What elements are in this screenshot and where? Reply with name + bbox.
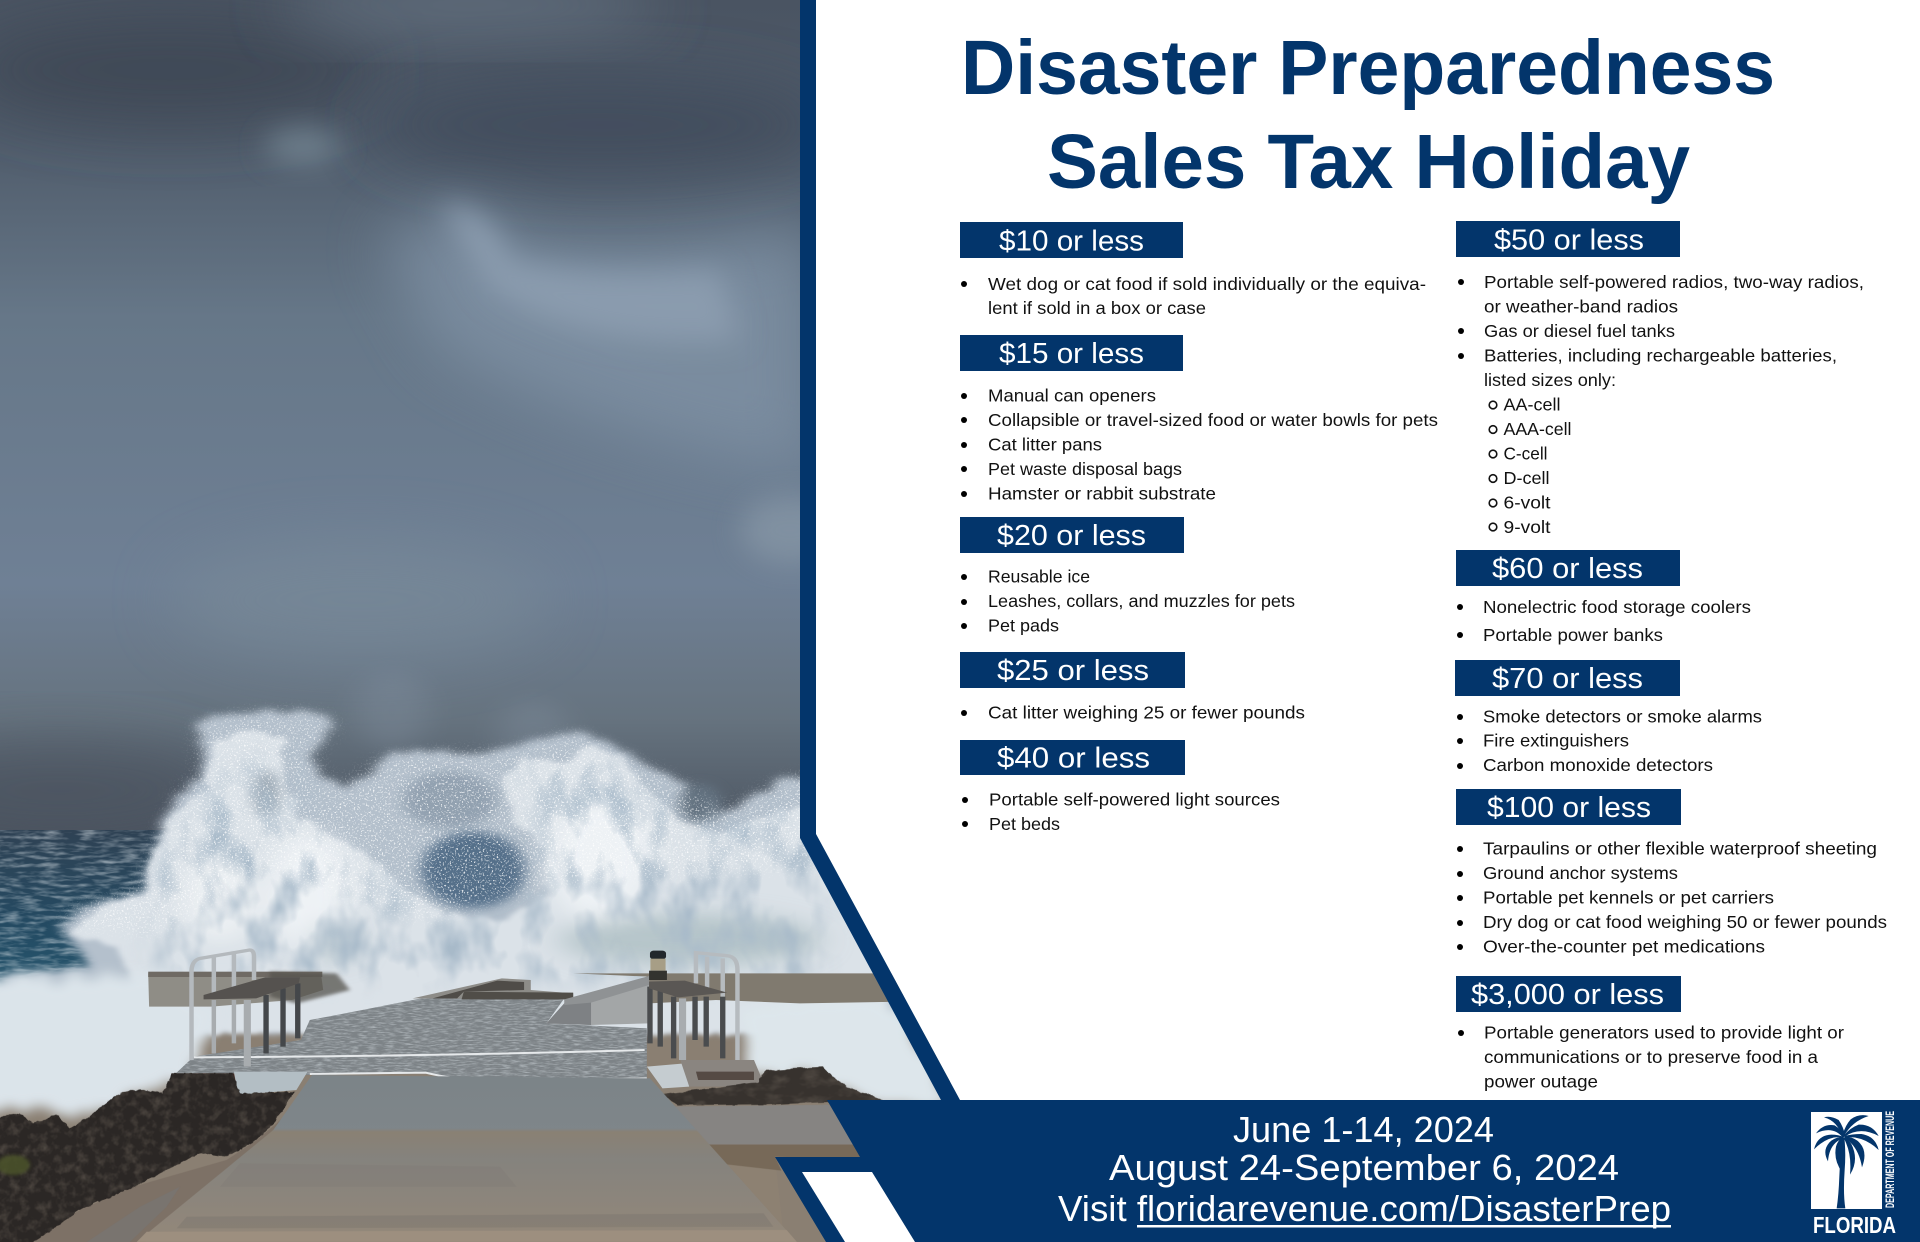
footer dates and link (1058, 1109, 1671, 1229)
sea (0, 830, 330, 1015)
section: $70 or less: Fire extinguishers (1483, 730, 1629, 750)
section: $25 or less: Cat litter weighing 25 or fewer pounds (988, 702, 1305, 722)
section: $100 or less: Tarpaulins or other flexible waterproof sheeting (1483, 838, 1877, 858)
right rocks (663, 1067, 883, 1106)
section: $10 or less: lent if sold in a box or case (988, 298, 1206, 318)
walkway bands (137, 1163, 797, 1242)
section: $50 or less: 9-volt (1504, 517, 1551, 537)
navy angled divider (800, 0, 960, 1100)
section: $10 or less: $10 or less (999, 226, 1144, 258)
section: $15 or less: Manual can openers (988, 386, 1156, 406)
section: $3,000 or less: Portable generators used to provide light or (1484, 1022, 1844, 1042)
section: $50 or less (1456, 221, 1864, 537)
section: $70 or less: Carbon monoxide detectors (1483, 755, 1713, 775)
white content panel (816, 0, 1920, 1100)
right bench and railing (649, 953, 737, 1060)
outer spray (0, 712, 994, 1033)
left rocks (0, 1073, 295, 1242)
logo wordmark: FLORIDA (1813, 1212, 1896, 1238)
panel: left price column (960, 222, 1438, 834)
pier structure (148, 950, 904, 1097)
right ground (663, 1067, 883, 1242)
footer band (775, 1100, 1920, 1242)
section: $25 or less: $25 or less (997, 655, 1149, 687)
darker gap in the spray (253, 770, 722, 908)
section: $15 or less: Pet waste disposal bags (988, 459, 1182, 479)
section: $60 or less (1456, 550, 1751, 645)
section: $20 or less: Pet pads (988, 616, 1059, 636)
photo: storm waves crashing over a pier (0, 0, 994, 1242)
gravel path (20, 1107, 293, 1242)
section: $50 or less: AA-cell (1504, 394, 1560, 414)
logo: Florida Department of Revenue (1811, 1111, 1897, 1238)
storm sky (0, 0, 840, 835)
shore at lower left (0, 1073, 797, 1242)
right slab side (708, 1145, 861, 1171)
section: $15 or less: Hamster or rabbit substrate (988, 484, 1216, 504)
section: $50 or less: Portable self-powered radios, two-way radios, (1484, 272, 1864, 292)
section: $10 or less: Wet dog or cat food if sold individually or the equiva- (988, 274, 1426, 294)
section: $15 or less: Cat litter pans (988, 434, 1102, 454)
section: $70 or less (1455, 660, 1762, 775)
section: $100 or less: Ground anchor systems (1483, 863, 1678, 883)
lantern (649, 951, 667, 980)
section: $50 or less: listed sizes only: (1484, 370, 1616, 390)
footer dates and link: August 24-September 6, 2024 (1109, 1147, 1619, 1188)
section: $100 or less: Over-the-counter pet medications (1483, 936, 1765, 956)
section: $15 or less (960, 335, 1438, 504)
left sea wall (148, 972, 350, 1007)
title: Disaster Preparedness (961, 25, 1775, 111)
section: $10 or less (960, 222, 1426, 318)
footer dates and link: June 1-14, 2024 (1233, 1109, 1494, 1150)
section: $100 or less: $100 or less (1487, 792, 1651, 824)
section: $40 or less (960, 740, 1280, 834)
section: $60 or less: Portable power banks (1483, 625, 1663, 645)
icon: palm tree (1814, 1115, 1879, 1208)
ground base under the pier (0, 1010, 950, 1242)
section: $15 or less: Collapsible or travel-sized food or water bowls for pets (988, 410, 1438, 430)
right steps (647, 1060, 765, 1088)
section: $50 or less: Batteries, including rechargeable batteries, (1484, 346, 1837, 366)
left pier base (167, 1072, 308, 1097)
section: $40 or less: Pet beds (989, 814, 1060, 834)
faint high spray (356, 670, 570, 773)
far ramp and slots (412, 978, 573, 999)
breaking wave foam (0, 670, 994, 1033)
section: $40 or less: Portable self-powered light sources (989, 790, 1280, 810)
moss on rocks (0, 1155, 30, 1175)
bright foam highlights (183, 797, 821, 967)
section: $70 or less: Smoke detectors or smoke alarms (1483, 706, 1762, 726)
main white foam body (68, 730, 889, 1033)
footer dates and link: Visit floridarevenue.com/DisasterPrep (1058, 1188, 1671, 1229)
lower foam (0, 973, 957, 1115)
right slab (673, 1105, 858, 1145)
section: $40 or less: $40 or less (997, 742, 1150, 774)
section: $100 or less (1456, 789, 1887, 956)
section: $50 or less: or weather-band radios (1484, 296, 1678, 316)
section: $70 or less: $70 or less (1492, 663, 1643, 695)
left bench and railing (192, 950, 300, 1067)
panel: right price column (1455, 221, 1887, 1092)
section: $3,000 or less: communications or to preserve food in a (1484, 1047, 1818, 1067)
section: $3,000 or less (1456, 976, 1844, 1092)
section: $50 or less: Gas or diesel fuel tanks (1484, 321, 1675, 341)
section: $50 or less: $50 or less (1494, 224, 1644, 256)
concrete side ramp (546, 976, 649, 1025)
section: $3,000 or less: $3,000 or less (1471, 979, 1664, 1011)
title (961, 25, 1775, 205)
section: $20 or less: Leashes, collars, and muzzles for pets (988, 591, 1295, 611)
foam mottling (157, 747, 820, 980)
section: $100 or less: Portable pet kennels or pet carriers (1483, 888, 1774, 908)
section: $50 or less: AAA-cell (1504, 419, 1572, 439)
logo vertical department text: DEPARTMENT OF REVENUE (1885, 1111, 1897, 1208)
title: Sales Tax Holiday (1047, 119, 1690, 205)
flooded walkway (176, 998, 647, 1082)
section: $3,000 or less: power outage (1484, 1072, 1598, 1092)
section: $25 or less (960, 652, 1305, 722)
section: $15 or less: $15 or less (999, 338, 1144, 370)
section: $60 or less: Nonelectric food storage coolers (1483, 597, 1751, 617)
dry concrete walkway (137, 1075, 797, 1242)
section: $50 or less: D-cell (1504, 468, 1550, 488)
section: $20 or less: Reusable ice (988, 566, 1090, 586)
white spray droplets (63, 713, 820, 933)
section: $20 or less (960, 517, 1295, 636)
right sea wall (573, 973, 904, 1003)
section: $100 or less: Dry dog or cat food weighing 50 or fewer pounds (1483, 912, 1887, 932)
section: $50 or less: 6-volt (1504, 492, 1551, 512)
foam lines on the walkway (194, 1050, 647, 1082)
section: $20 or less: $20 or less (997, 520, 1146, 552)
section: $60 or less: $60 or less (1492, 553, 1643, 585)
section: $50 or less: C-cell (1504, 444, 1548, 464)
white corner accent (802, 1172, 915, 1242)
